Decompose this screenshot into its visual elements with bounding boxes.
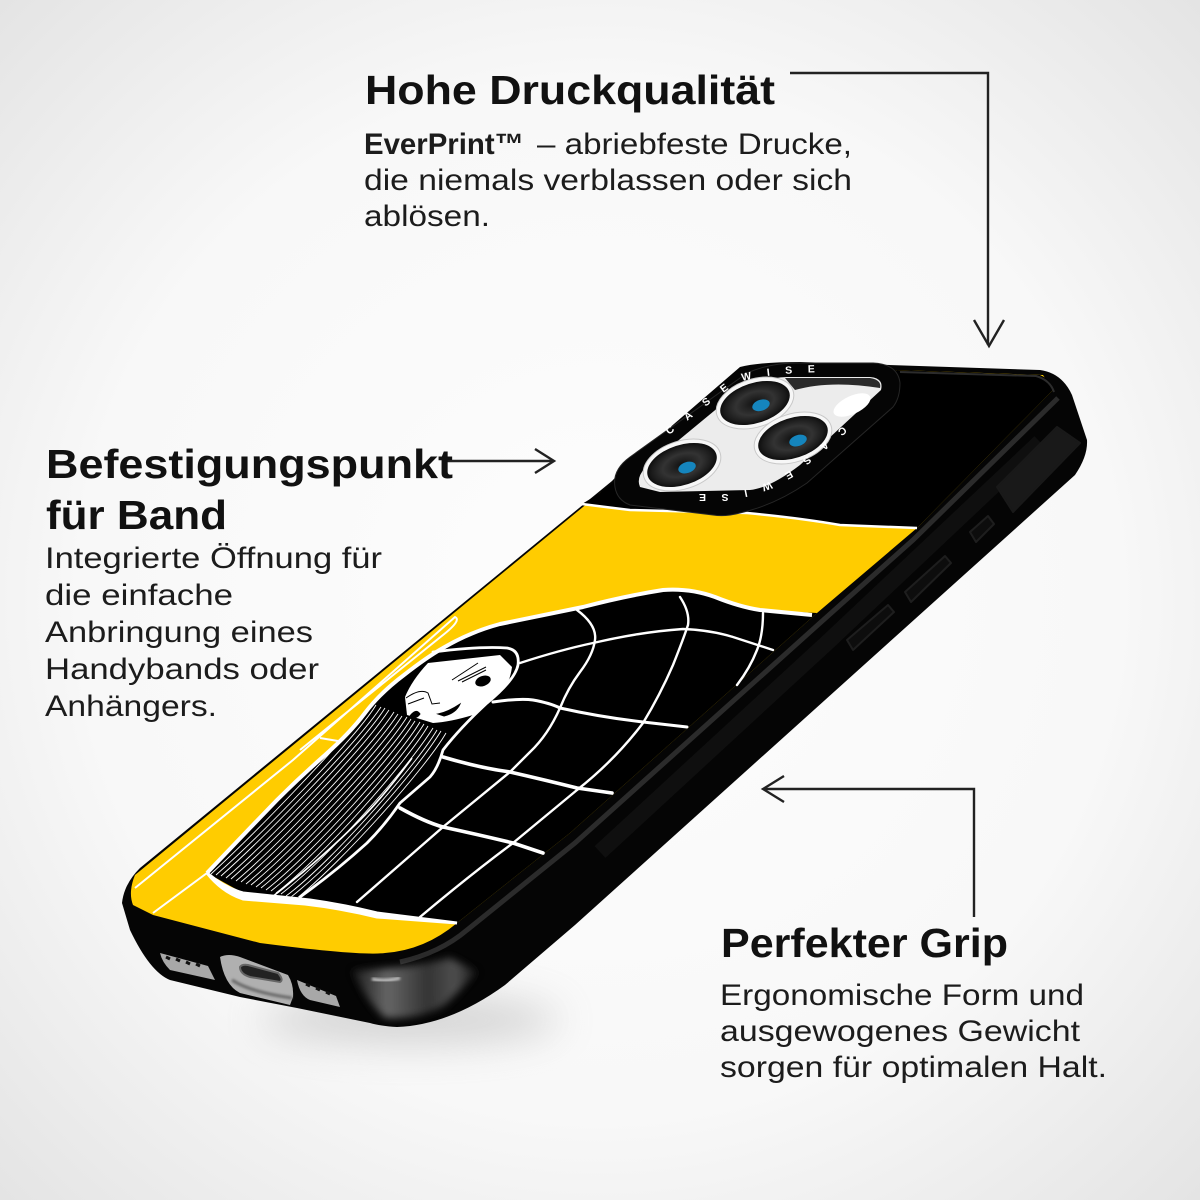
body: grip: Ergonomische Form und bbox=[720, 979, 1084, 1012]
text block: strap point bbox=[45, 441, 453, 723]
arrow: strap point bbox=[447, 449, 554, 473]
figure black area bbox=[207, 590, 817, 923]
body: strap point: Anbringung eines bbox=[45, 616, 313, 649]
arrow: top bbox=[790, 73, 1004, 346]
body: print quality: die niemals verblassen oder sich bbox=[364, 164, 852, 197]
heading: strap point bbox=[46, 441, 453, 538]
hair lines bbox=[211, 703, 446, 899]
side detail band bbox=[600, 442, 1040, 852]
ring brand text bottom: CASEWISE bbox=[699, 428, 846, 501]
thin yellow lines bbox=[135, 617, 457, 913]
screen top rim bbox=[900, 372, 1054, 392]
side buttons bbox=[847, 427, 1080, 650]
left speaker bbox=[160, 953, 215, 980]
heading: strap point: Befestigungspunkt bbox=[46, 441, 453, 487]
lens top bbox=[710, 368, 800, 438]
net grid lines bbox=[300, 597, 773, 917]
body: grip: sorgen für optimalen Halt. bbox=[720, 1051, 1107, 1084]
body: grip: ausgewogenes Gewicht bbox=[720, 1015, 1080, 1048]
body: print quality: EverPrint™ bbox=[364, 128, 524, 161]
heading: print quality: Hohe Druckqualität bbox=[365, 67, 775, 113]
heading: grip: Perfekter Grip bbox=[721, 920, 1008, 966]
black upper area bbox=[582, 370, 1053, 528]
body: strap point: Integrierte Öffnung für bbox=[45, 542, 382, 575]
ring brand text top: CASEWISE bbox=[666, 365, 814, 434]
camera glass bbox=[639, 377, 882, 492]
phone case bbox=[122, 362, 1088, 1027]
body: print quality: – abriebfeste Drucke, bbox=[537, 128, 852, 161]
body: strap point bbox=[45, 542, 382, 723]
lens left bbox=[637, 430, 727, 500]
arrow: grip bbox=[763, 776, 974, 917]
case body bbox=[122, 362, 1087, 1027]
body: strap point: Handybands oder bbox=[45, 653, 319, 686]
body: print quality: ablösen. bbox=[364, 200, 490, 233]
right speaker bbox=[297, 980, 340, 1007]
text block: grip bbox=[720, 920, 1107, 1084]
heading: strap point: für Band bbox=[46, 492, 227, 538]
phone shadow bbox=[260, 996, 560, 1044]
white wavy upper line bbox=[582, 504, 917, 528]
figure outline bbox=[207, 590, 812, 873]
lens right bbox=[748, 403, 838, 473]
side highlight strip bbox=[400, 398, 1058, 962]
face bbox=[405, 655, 512, 723]
bottom corner highlight bbox=[352, 958, 478, 1018]
screen yellow back bbox=[131, 370, 1053, 954]
body: strap point: die einfache bbox=[45, 579, 233, 612]
figure lower white border bbox=[207, 873, 457, 923]
body: grip bbox=[720, 979, 1107, 1084]
camera module bbox=[614, 362, 900, 516]
text block: print quality bbox=[364, 67, 852, 233]
charging port bbox=[220, 955, 293, 1005]
body: strap point: Anhängers. bbox=[45, 690, 217, 723]
body: print quality bbox=[364, 128, 852, 233]
